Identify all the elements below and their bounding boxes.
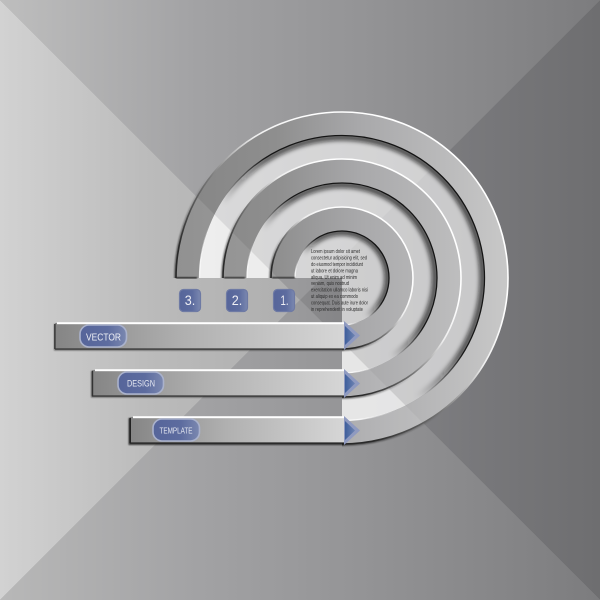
arrow 2 bbox=[344, 369, 360, 398]
concentric ring graphic bbox=[176, 112, 508, 444]
light ring bands bbox=[212, 148, 472, 408]
lorem ipsum text block: veniam, quis nostrud bbox=[311, 281, 349, 287]
soft outer shadows bbox=[173, 186, 431, 447]
lorem ipsum text block bbox=[311, 249, 368, 313]
label: template: TEMPLATE bbox=[160, 425, 193, 435]
bar 1: vector bbox=[54, 322, 344, 350]
lorem ipsum text block: consequat. Duis aute irure dolor bbox=[311, 301, 368, 307]
brighter wedge on the light bands bbox=[200, 215, 406, 420]
number badge 3 bbox=[180, 290, 200, 312]
label: design bbox=[118, 372, 164, 394]
gray ring bands bbox=[188, 124, 496, 432]
bar 3: template bbox=[128, 416, 344, 445]
lorem ipsum text block: consectetur adipisicing elit, sed bbox=[311, 256, 367, 262]
lorem ipsum text block: in reprehenderit in voluptate bbox=[311, 307, 363, 313]
arrow 1 bbox=[344, 321, 360, 350]
inner bevel edges bbox=[200, 136, 484, 420]
arrow 3 bbox=[344, 416, 360, 445]
number badge 2 bbox=[226, 290, 248, 312]
inner text disc bbox=[295, 231, 389, 325]
number badge 1 bbox=[274, 290, 294, 312]
lorem ipsum text block: Lorem ipsum dolor sit amet bbox=[311, 249, 360, 255]
lorem ipsum text block: aliqua. Ut enim ad minim bbox=[311, 275, 357, 281]
number badge 1: 1. bbox=[280, 293, 288, 308]
outer bevel edges bbox=[176, 112, 508, 444]
lighter wedge on the gray bands bbox=[177, 198, 358, 443]
label: design: DESIGN bbox=[127, 378, 155, 388]
number badge 3: 3. bbox=[185, 293, 195, 308]
label: template bbox=[153, 419, 200, 441]
lorem ipsum text block: ut aliquip ex ea commodo bbox=[311, 294, 358, 300]
label: vector bbox=[80, 325, 126, 347]
soft inner shadows bbox=[224, 136, 484, 396]
label: vector: VECTOR bbox=[86, 332, 121, 344]
ring end shadows bbox=[176, 277, 295, 279]
lorem ipsum text block: do eiusmod tempor incididunt bbox=[311, 262, 363, 268]
bar 2: design bbox=[91, 369, 344, 398]
number badge 2: 2. bbox=[232, 293, 242, 308]
lorem ipsum text block: ut labore et dolore magna bbox=[311, 268, 358, 274]
lorem ipsum text block: exercitation ullamco laboris nisi bbox=[311, 288, 368, 294]
